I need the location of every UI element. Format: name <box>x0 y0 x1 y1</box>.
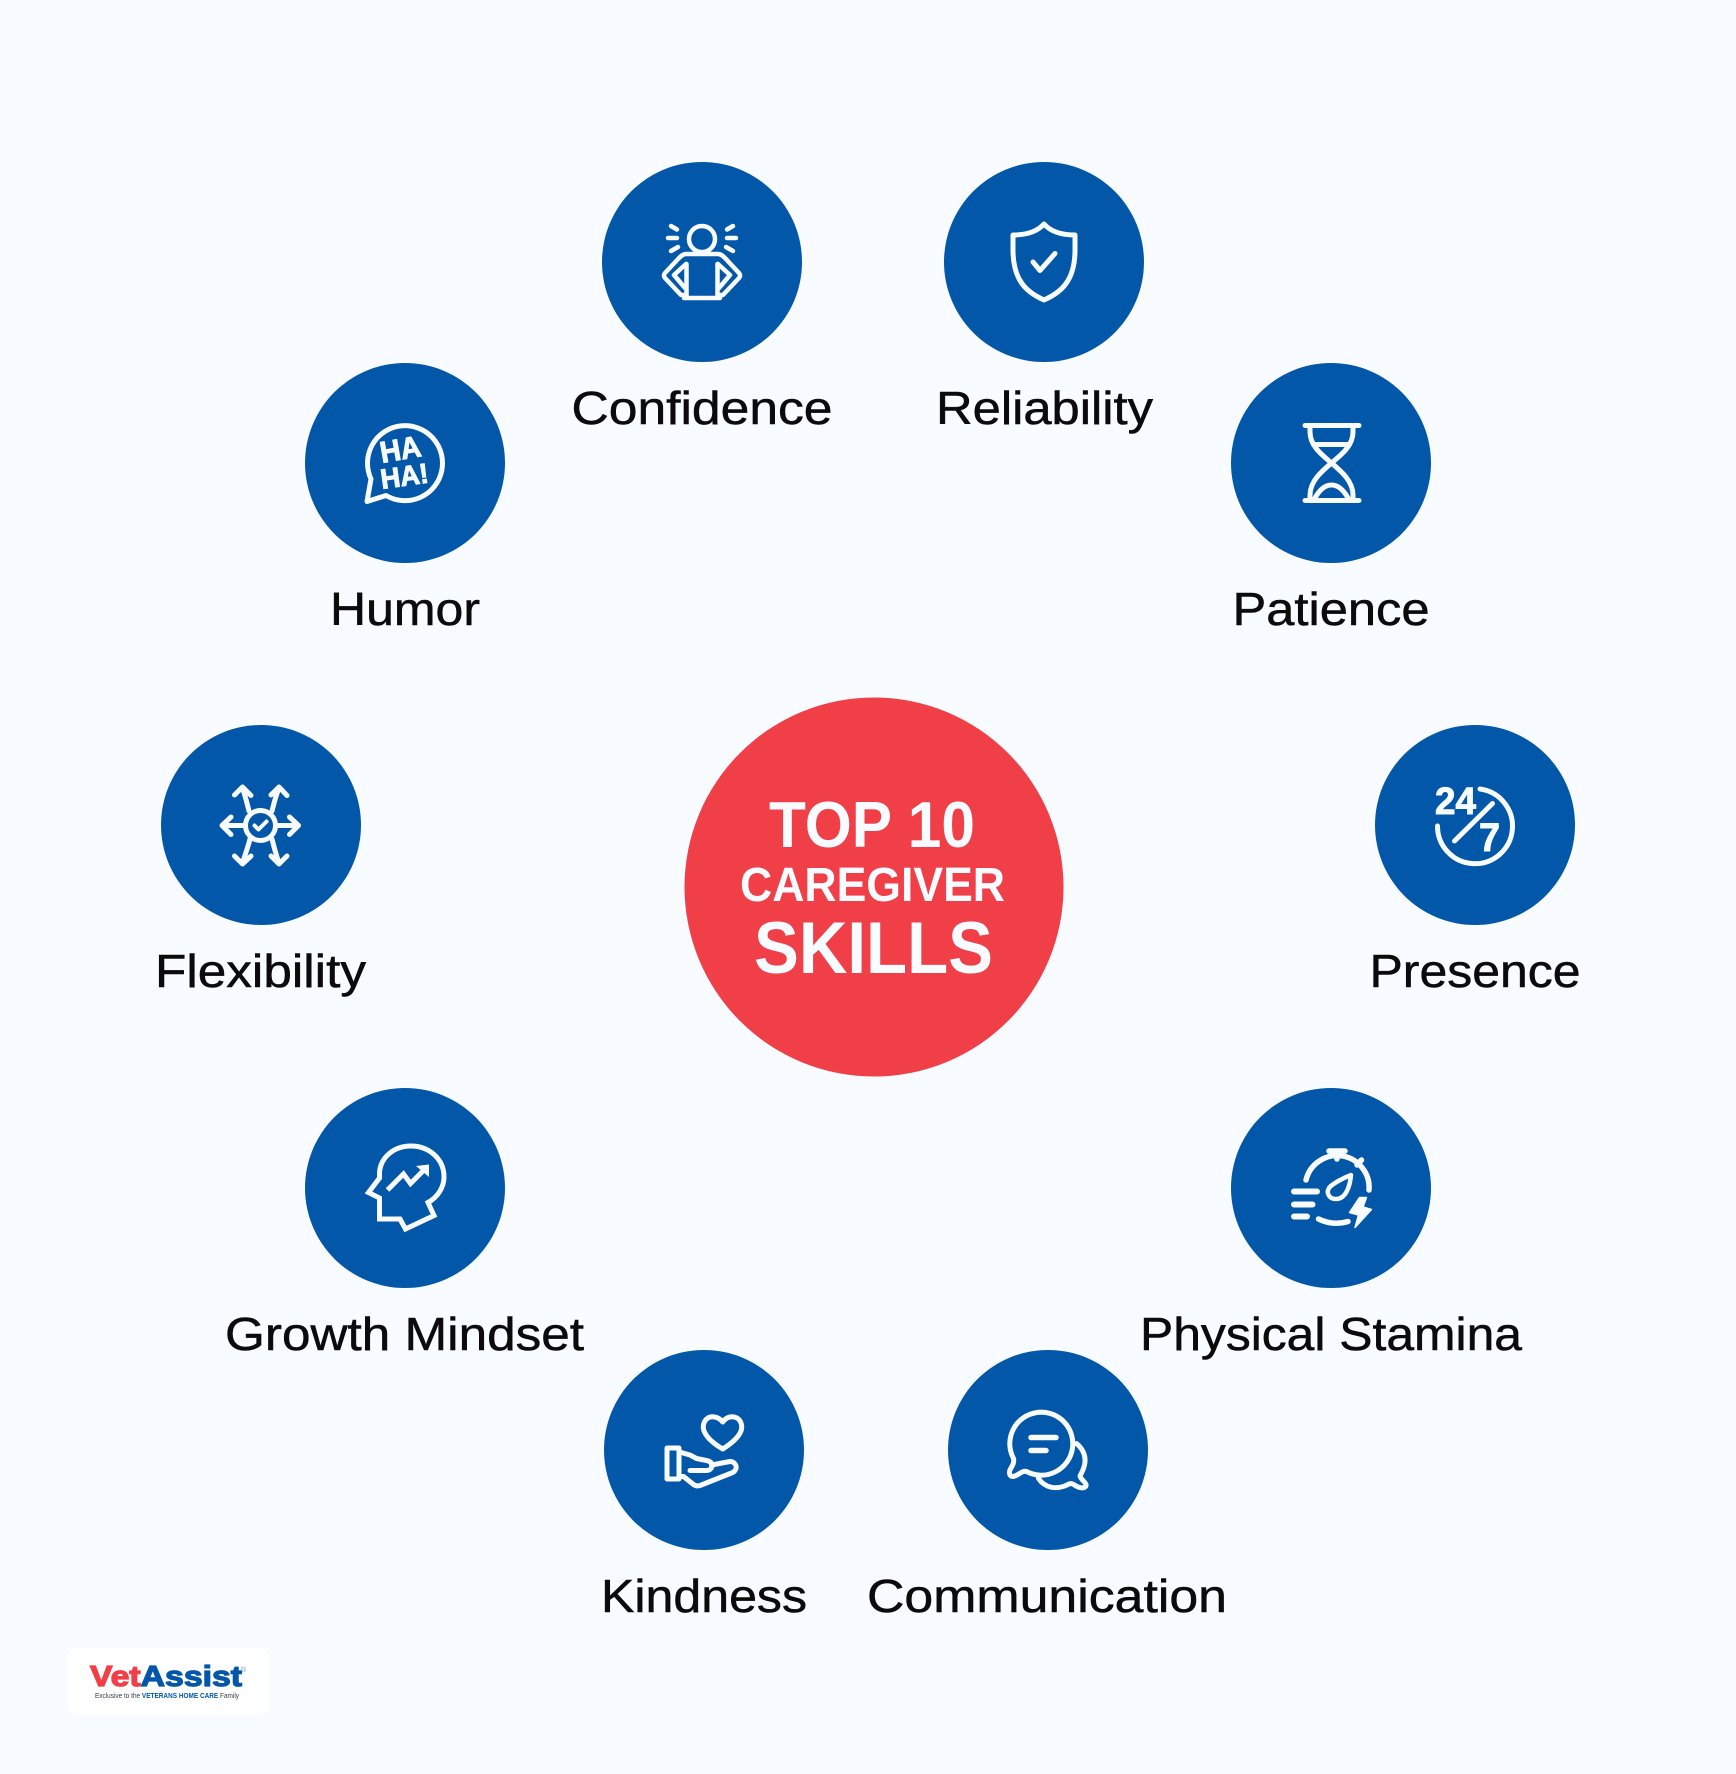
title: SKILLS <box>754 908 993 989</box>
label: Physical Stamina <box>1140 1308 1522 1360</box>
skill: Patience <box>1231 363 1431 635</box>
logo tagline: Exclusive to the VETERANS HOME CARE Family <box>95 1691 239 1700</box>
logo: VetAssist <box>68 1648 268 1715</box>
title: CAREGIVER <box>740 859 1005 912</box>
label: Patience <box>1232 583 1430 635</box>
skill: Presence <box>1370 725 1580 997</box>
icon: confident person <box>664 226 740 298</box>
label: Communication <box>867 1570 1227 1622</box>
title <box>740 788 1005 989</box>
label: Flexibility <box>155 945 366 997</box>
label: Presence <box>1370 945 1580 997</box>
label: Confidence <box>572 382 832 434</box>
skill: Communication <box>867 1350 1227 1622</box>
registered mark: ® <box>241 1666 247 1674</box>
icon: stopwatch with lightning <box>1294 1151 1372 1228</box>
central hub: Top 10 Caregiver Skills <box>684 698 1064 1076</box>
label: Humor <box>330 583 480 635</box>
icon: hand holding heart <box>667 1417 742 1486</box>
icon: HA HA speech bubble: HA <box>377 430 424 470</box>
skill: Kindness <box>601 1350 807 1622</box>
label: Reliability <box>936 382 1153 434</box>
skill: Flexibility <box>155 725 366 997</box>
icon: hourglass <box>1305 426 1359 500</box>
icon: 24/7 clock <box>1435 781 1512 864</box>
skill: Physical Stamina <box>1140 1088 1522 1360</box>
icon: chat bubbles <box>1009 1412 1086 1488</box>
icon: arrows radiating from check <box>222 787 298 864</box>
icon: HA HA speech bubble <box>367 426 442 502</box>
icon: 24/7 clock: 24 <box>1435 781 1476 823</box>
label: Growth Mindset <box>225 1308 584 1360</box>
icon: 24/7 clock: 7 <box>1479 816 1500 860</box>
logo wordmark: VetAssist <box>90 1661 242 1693</box>
skill: Reliability <box>936 162 1153 434</box>
icon: HA HA speech bubble: HA! <box>379 458 430 495</box>
icon: shield with check <box>1013 224 1075 300</box>
skill: Humor <box>305 363 505 635</box>
skill: Confidence <box>572 162 832 434</box>
title: TOP 10 <box>769 788 975 861</box>
icon: head with rising arrow <box>368 1146 444 1229</box>
skill: Growth Mindset <box>225 1088 584 1360</box>
label: Kindness <box>601 1570 807 1622</box>
